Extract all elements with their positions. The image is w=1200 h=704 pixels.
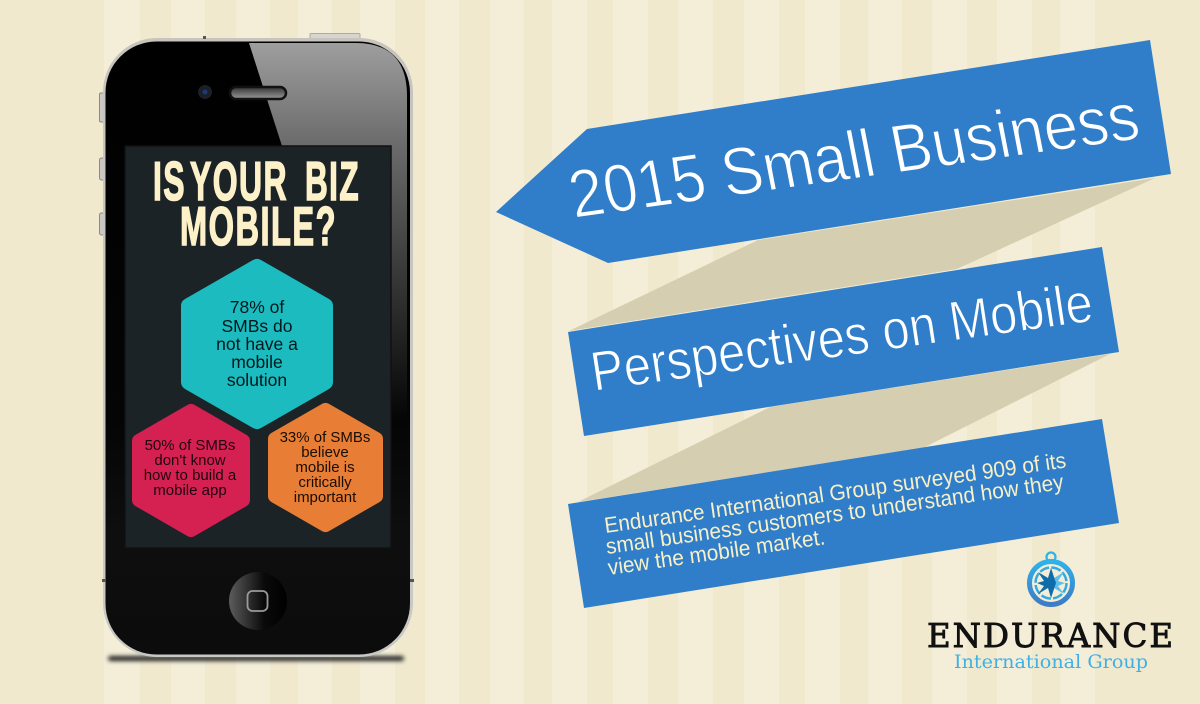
hexagon: 50% stat: mobile app bbox=[153, 482, 227, 499]
banner: subtitle bbox=[568, 247, 1119, 436]
hexagon: 78% stat: 78% of bbox=[230, 297, 284, 317]
hexagon: 78% stat: solution bbox=[227, 370, 287, 390]
icon: compass bbox=[1030, 552, 1072, 604]
phone black body bbox=[106, 42, 410, 654]
description text: view the mobile market. bbox=[606, 524, 827, 580]
endurance logo bbox=[927, 552, 1175, 673]
hexagon: 78% stat: mobile bbox=[231, 352, 283, 372]
home button bbox=[229, 572, 287, 630]
logo tagline: International Group bbox=[954, 651, 1148, 673]
screen title: BIZ bbox=[305, 150, 360, 212]
description text: Endurance International Group surveyed 909 of its bbox=[603, 448, 1068, 538]
hexagon: 78% stat bbox=[189, 267, 325, 421]
phone silver frame bbox=[103, 38, 413, 657]
glass glare bbox=[249, 43, 407, 420]
description text bbox=[603, 448, 1068, 580]
description text: small business customers to understand how they bbox=[604, 469, 1065, 559]
hexagon: 78% stat: SMBs do bbox=[222, 316, 292, 336]
phone screen bbox=[125, 146, 391, 548]
front camera bbox=[198, 85, 212, 99]
banner: title arrow: 2015 Small Business bbox=[563, 79, 1145, 233]
ribbon fold shadow lower bbox=[578, 354, 1110, 502]
screen title: IS bbox=[153, 150, 186, 212]
screen title: MOBILE? bbox=[180, 195, 337, 257]
ribbon fold shadow upper bbox=[569, 178, 1155, 331]
screen title bbox=[153, 150, 360, 257]
hexagon: 50% stat: 50% of SMBs bbox=[145, 437, 235, 454]
logo wordmark: ENDURANCE bbox=[927, 616, 1175, 655]
phone top button bbox=[310, 34, 360, 40]
banner: subtitle: Perspectives on Mobile bbox=[586, 270, 1097, 403]
hexagon: 33% stat: mobile is bbox=[295, 459, 355, 476]
banner: description bbox=[568, 419, 1119, 608]
speaker bbox=[230, 87, 286, 99]
phone bbox=[100, 34, 414, 661]
phone side buttons bbox=[100, 93, 104, 235]
phone ground shadow bbox=[108, 656, 404, 661]
hexagon: 78% stat: not have a bbox=[216, 334, 298, 354]
antenna ticks bbox=[102, 36, 414, 582]
hexagon: 50% stat bbox=[139, 411, 243, 530]
hexagon: 33% stat bbox=[275, 410, 376, 525]
hexagon: 50% stat: how to build a bbox=[144, 467, 237, 484]
banner: title arrow bbox=[496, 40, 1171, 263]
screen title: YOUR bbox=[190, 150, 288, 212]
hexagon: 33% stat: 33% of SMBs bbox=[280, 429, 370, 446]
hexagon: 50% stat: don't know bbox=[154, 452, 226, 469]
hexagon: 33% stat: important bbox=[294, 489, 357, 506]
hexagon: 33% stat: critically bbox=[298, 474, 352, 491]
hexagon: 33% stat: believe bbox=[301, 444, 349, 461]
